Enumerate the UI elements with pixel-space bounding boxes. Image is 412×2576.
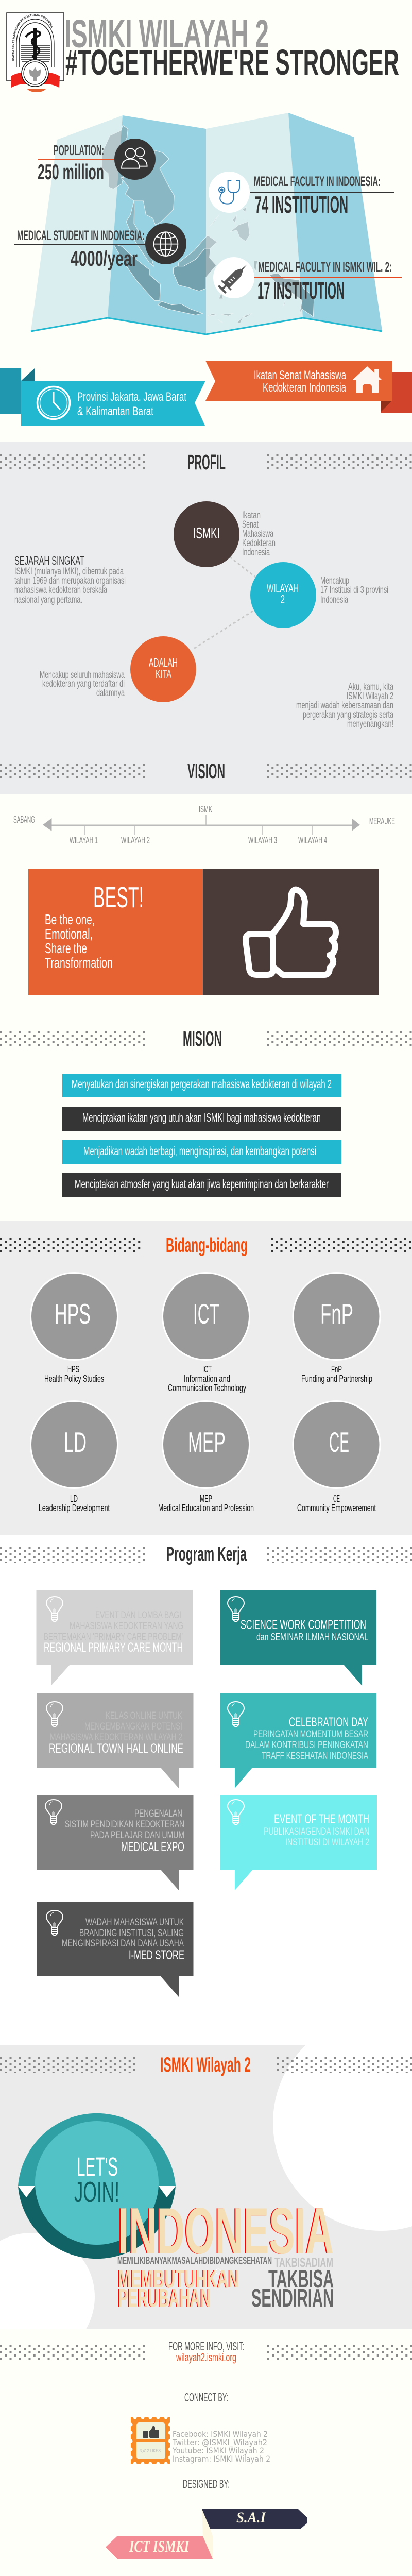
heading: vision: VISION xyxy=(187,759,225,783)
text: sejarah singkat xyxy=(14,554,126,605)
flag: designers: S.A.I xyxy=(236,2509,266,2526)
text: ISMKI expansion xyxy=(242,510,276,558)
section: program kerja xyxy=(0,1535,412,2045)
circle: CE: CE xyxy=(329,1426,349,1458)
circle: LD: Leadership Development xyxy=(39,1503,110,1513)
circle: ICT xyxy=(163,1273,249,1393)
map xyxy=(31,113,382,334)
circle: WILAYAH 2: 2 xyxy=(281,592,285,606)
banner: location: & Kalimantan Barat xyxy=(77,404,153,418)
text: social links: Twitter: @ISMKI_Wilayah2 xyxy=(172,2437,267,2448)
bubble: event of the month xyxy=(220,1795,377,1890)
circle: MEP: MEP xyxy=(200,1494,212,1504)
banner: organisation xyxy=(205,361,412,413)
text: takbisa sendirian: SENDIRIAN xyxy=(251,2284,334,2312)
circle: FnP: FnP xyxy=(331,1364,342,1375)
text: wilayah description: Indonesia xyxy=(320,594,348,605)
timeline: WILAYAH 1 xyxy=(70,835,98,845)
text: membutuhkan perubahan: PERUBAHAN xyxy=(117,2284,210,2312)
text: takbisa sendirian: TAKBISA xyxy=(268,2265,334,2293)
flag: designers: ICT ISMKI xyxy=(129,2537,190,2555)
text: ISMKI expansion: Kedokteran xyxy=(242,537,276,549)
circle: HPS: HPS xyxy=(55,1298,91,1330)
timeline: WILAYAH 4 xyxy=(298,835,327,845)
banner: location: Provinsi Jakarta, Jawa Barat xyxy=(77,390,186,404)
mission item 2 xyxy=(62,1107,341,1131)
panel: BEST: Transformation xyxy=(45,955,113,971)
timeline: ISMKI xyxy=(199,804,214,815)
text: social links: Instagram: ISMKI Wilayah 2 xyxy=(173,2454,270,2464)
bubble: event of the month: PUBLIKASIAGENDA ISMKI DAN xyxy=(264,1826,369,1837)
icon: globe xyxy=(145,223,186,264)
bubble: regional town hall online: REGIONAL TOWN HALL ONLINE xyxy=(49,1741,183,1756)
text: social links: Facebook: ISMKI Wilayah 2 xyxy=(173,2429,268,2439)
text: sejarah singkat: SEJARAH SINGKAT xyxy=(14,554,84,567)
circle: MEP xyxy=(158,1401,254,1513)
stat: population xyxy=(38,139,156,184)
timeline: WILAYAH 2 xyxy=(121,835,150,845)
icon: likes stamp xyxy=(129,2415,172,2466)
circle: FnP: Funding and Partnership xyxy=(301,1374,372,1384)
panel: BEST: Emotional, xyxy=(45,926,93,942)
bubble: regional primary care month: MAHASISWA KEDOKTERAN YANG xyxy=(70,1620,183,1632)
badge: let's join: LET'S xyxy=(77,2152,118,2181)
panel: BEST: BEST! xyxy=(93,881,144,914)
text: membutuhkan perubahan: MEMBUTUHKAN xyxy=(117,2265,238,2293)
bubble: science work competition: dan SEMINAR ILMIAH NASIONAL xyxy=(256,1632,368,1643)
text: membutuhkan perubahan: PERUBAHAN xyxy=(118,2284,211,2312)
badge: let's join: JOIN! xyxy=(74,2176,119,2209)
bubble: medical expo: MEDICAL EXPO xyxy=(121,1840,184,1854)
bubble: regional town hall online: MENGEMBANGKAN POTENSI xyxy=(84,1721,182,1732)
circle: HPS: Health Policy Studies xyxy=(44,1374,104,1384)
bubble: i-med store: WADAH MAHASISWA UNTUK xyxy=(85,1917,184,1928)
bubble: i-med store: BRANDING INSTITUSI, SALING xyxy=(79,1927,184,1939)
timeline: WILAYAH 3 xyxy=(248,835,277,845)
bubble: regional town hall online xyxy=(37,1693,194,1788)
icon: people xyxy=(114,139,156,180)
bubble: medical expo: SISTIM PENDIDIKAN KEDOKTERAN xyxy=(65,1819,184,1830)
icon: clock xyxy=(37,386,70,419)
stat: medical students: MEDICAL STUDENT IN INDONESIA: xyxy=(17,228,145,243)
stat: medical faculty in Indonesia xyxy=(209,172,394,218)
text: ISMKI expansion: Indonesia xyxy=(242,547,270,558)
text: ISMKI expansion: Ikatan xyxy=(242,510,261,521)
bubble: regional town hall online: MAHASISWA KEDOKTERAN WILAYAH 2 xyxy=(50,1732,182,1743)
section: vision xyxy=(0,759,412,995)
text: sejarah singkat: ISMKI (mulanya IMKI), dibentuk pada xyxy=(14,566,124,577)
bubble: regional town hall online: KELAS ONLINE UNTUK xyxy=(106,1710,182,1721)
banner: organisation: Ikatan Senat Mahasiswa xyxy=(254,368,346,382)
circle: ADALAH KITA: ADALAH xyxy=(149,656,178,669)
panel: BEST: Share the xyxy=(45,940,87,956)
text: social links xyxy=(172,2429,270,2464)
text: aku kamu kita xyxy=(296,681,393,730)
text: wilayah description: Mencakup xyxy=(320,575,349,586)
circle: ICT: ICT xyxy=(202,1364,212,1375)
section: profil: PROFIL xyxy=(187,450,226,474)
bubble: event of the month: INSTITUSI DI WILAYAH 2 xyxy=(285,1837,369,1848)
text: adalah kita description: kedokteran yang terdaftar di xyxy=(42,678,125,689)
text: sejarah singkat: tahun 1969 dan merupakan organisasi xyxy=(14,575,126,586)
bubble: i-med store: I-MED STORE xyxy=(129,1948,184,1962)
section: footer xyxy=(0,2340,412,2559)
timeline xyxy=(13,804,395,845)
circle: MEP: MEP xyxy=(188,1426,226,1458)
heading: mission: MISION xyxy=(183,1027,222,1050)
bubble: medical expo: PENGENALAN xyxy=(134,1808,182,1819)
circle: HPS xyxy=(31,1273,117,1384)
panel: BEST: Be the one, xyxy=(45,911,95,927)
badge: let's join xyxy=(18,2113,176,2259)
icon: syringe xyxy=(213,257,254,298)
circle: FnP: FnP xyxy=(320,1298,353,1330)
circle: CE xyxy=(293,1401,380,1513)
text: wilayah description xyxy=(320,575,388,605)
circle: MEP: Medical Education and Profession xyxy=(158,1503,254,1513)
bubble: regional primary care month: REGIONAL PRIMARY CARE MONTH xyxy=(44,1640,183,1655)
icon: house xyxy=(352,366,382,393)
bubble: i-med store xyxy=(37,1902,194,1997)
bubble: celebration day xyxy=(220,1693,376,1788)
text: adalah kita description: Mencakup seluruh mahasiswa xyxy=(40,669,125,681)
circle: ADALAH KITA xyxy=(130,636,196,702)
bubble: medical expo: PADA PELAJAR DAN UMUM xyxy=(90,1829,184,1841)
section: mission xyxy=(0,1027,412,1197)
circle: LD: LD xyxy=(64,1426,87,1458)
stat: medical students xyxy=(14,223,186,270)
logo xyxy=(6,12,64,92)
text: sejarah singkat: nasional yang pertama. xyxy=(14,594,82,605)
stat: medical students: 4000/year xyxy=(71,246,138,270)
text: membutuhkan perubahan: MEMBUTUHKAN xyxy=(118,2265,239,2293)
circle: LD xyxy=(31,1401,117,1513)
circle: LD: LD xyxy=(70,1494,78,1504)
mission item 3 xyxy=(62,1140,341,1164)
heading: connect by: CONNECT BY: xyxy=(184,2391,228,2404)
bubble: regional primary care month: EVENT DAN LOMBA BAGI xyxy=(95,1609,181,1621)
section: ISMKI wilayah 2 join xyxy=(0,2009,412,2370)
mission item 4 xyxy=(62,1173,341,1197)
text: takbisa sendirian xyxy=(251,2265,334,2312)
icon: stethoscope xyxy=(209,172,250,213)
text: adalah kita description xyxy=(40,669,125,699)
panel: BEST xyxy=(28,869,379,995)
stat: population: POPULATION: xyxy=(54,142,104,158)
section: profil xyxy=(0,442,412,794)
bubble: celebration day: TRAFF KESEHATAN INDONESIA xyxy=(262,1750,368,1761)
text: more info: wilayah2.ismki.org xyxy=(176,2351,236,2364)
text: social links: Youtube: ISMKI Wilayah 2 xyxy=(172,2446,264,2455)
bubble: medical expo xyxy=(37,1795,194,1890)
text: membutuhkan perubahan xyxy=(117,2265,239,2312)
bubble: science work competition xyxy=(220,1590,376,1686)
land masses xyxy=(102,125,314,323)
bubble: celebration day: CELEBRATION DAY xyxy=(289,1715,368,1730)
stat: medical faculty in ISMKI wilayah 2 xyxy=(213,257,402,304)
text: more info xyxy=(168,2340,244,2364)
title: ISMKI WILAYAH 2: ISMKI WILAYAH 2 xyxy=(64,12,269,56)
text: memilikibanyak: MEMILIKIBANYAKMASALAHDIBIDANGKESEHATAN xyxy=(117,2256,272,2266)
mission item 1 xyxy=(62,1074,341,1097)
icon: likes stamp: 3,412 LIKES xyxy=(140,2448,161,2453)
banner: location xyxy=(0,368,205,426)
timeline: SABANG xyxy=(13,815,35,825)
circle: ICT: Communication Technology xyxy=(168,1383,246,1393)
section: bidang-bidang xyxy=(0,1221,412,1535)
circle: FnP xyxy=(293,1273,380,1384)
heading: program kerja: Program Kerja xyxy=(166,1544,247,1565)
bubble: i-med store: MENGINSPIRASI DAN DANA USAHA xyxy=(62,1938,184,1949)
circle: HPS: HPS xyxy=(67,1364,79,1375)
circle: ICT: ICT xyxy=(193,1298,219,1330)
heading: designed by: DESIGNED BY: xyxy=(183,2477,230,2490)
heading: ISMKI wilayah 2: ISMKI Wilayah 2 xyxy=(160,2054,251,2076)
circle: ADALAH KITA: KITA xyxy=(156,667,171,681)
stat: population: 250 million xyxy=(38,160,104,184)
bubble: regional primary care month xyxy=(36,1590,193,1686)
logo: IKATAN SENAT MAHASISWA KEDOKTERAN INDONESIA xyxy=(12,14,53,61)
heading: bidang-bidang: Bidang-bidang xyxy=(166,1234,248,1257)
circle: WILAYAH 2: WILAYAH xyxy=(267,582,299,595)
text: adalah kita description: dalamnya xyxy=(96,687,125,699)
banner: organisation: Kedokteran Indonesia xyxy=(263,381,346,395)
text: takbisadiam: TAKBISADIAM xyxy=(274,2255,333,2270)
circle: CE: Community Empowerement xyxy=(297,1503,376,1513)
circle: CE: CE xyxy=(333,1494,340,1504)
bubble: regional primary care month: BERTEMAKAN 'PRIMARY CARE PROBLEM' xyxy=(44,1631,183,1642)
circle: WILAYAH 2 xyxy=(250,562,316,628)
circle: ISMKI: ISMKI xyxy=(193,524,220,542)
text: ISMKI expansion: Mahasiswa xyxy=(242,528,273,539)
flag: designers xyxy=(106,2509,307,2559)
icon: thumbs up xyxy=(246,890,336,975)
circle: ICT: Information and xyxy=(184,1374,230,1384)
circle: ISMKI xyxy=(174,501,239,567)
text: more info: FOR MORE INFO, VISIT: xyxy=(168,2340,244,2353)
text: sejarah singkat: mahasiswa kedokteran berskala xyxy=(14,584,107,596)
text: ISMKI expansion: Senat xyxy=(242,519,259,530)
